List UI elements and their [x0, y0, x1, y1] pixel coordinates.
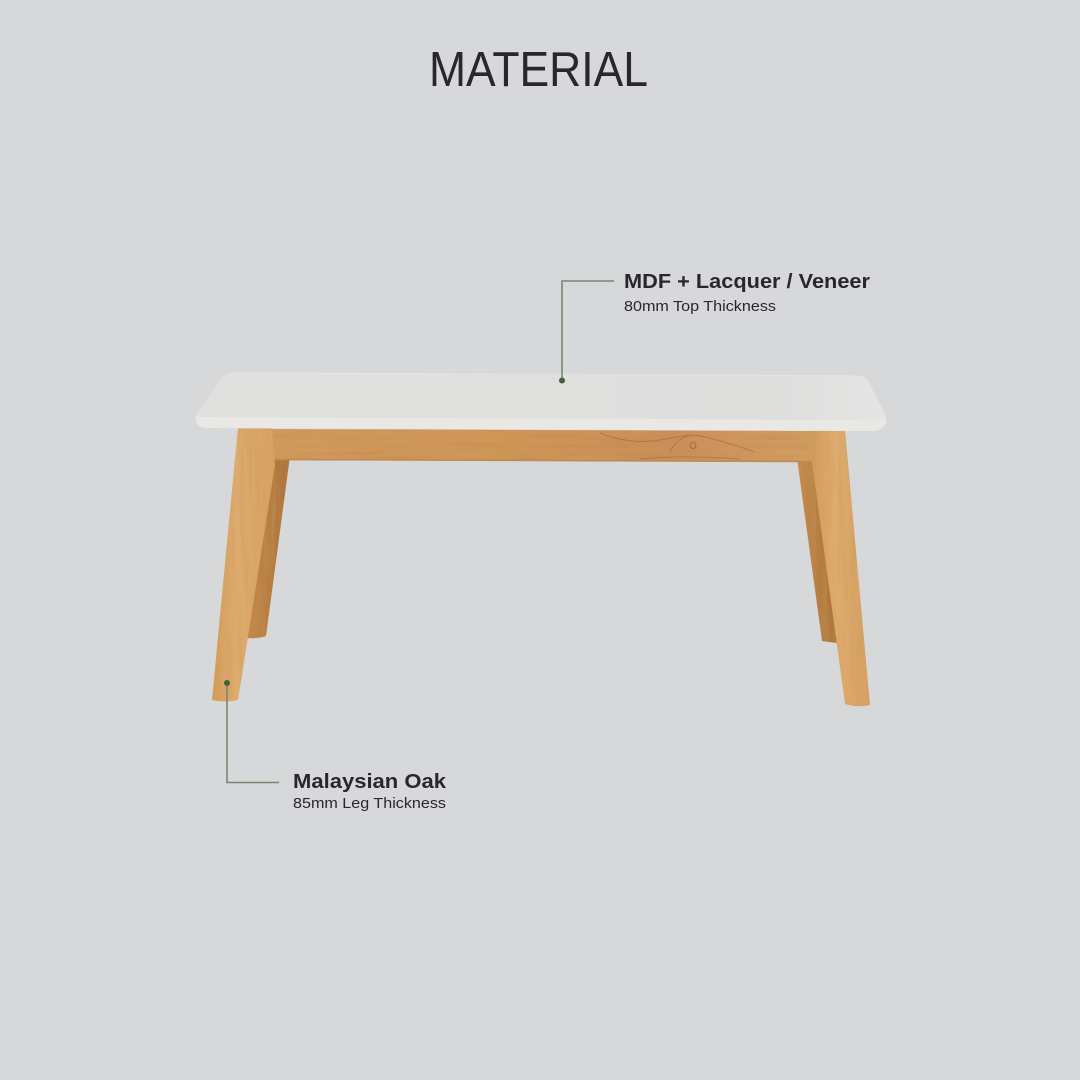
- front right leg: [812, 430, 870, 706]
- marker dot: leg: [224, 680, 230, 686]
- table top: [196, 373, 886, 431]
- apron rail: [270, 429, 813, 462]
- table illustration: [196, 373, 886, 706]
- heading: MDF: MDF + Lacquer / Veneer: [624, 271, 870, 293]
- leader line: leg: [227, 683, 279, 782]
- back right leg: [797, 458, 838, 643]
- leader line: top: [562, 281, 614, 380]
- title: MATERIAL: [429, 43, 648, 97]
- front left leg: [212, 427, 275, 702]
- subtext: top thickness: 80mm Top Thickness: [624, 298, 776, 315]
- heading: oak: Malaysian Oak: [293, 771, 447, 793]
- back left leg: [246, 456, 290, 638]
- callout: table top material: [559, 271, 870, 384]
- subtext: leg thickness: 85mm Leg Thickness: [293, 795, 446, 812]
- marker dot: top: [559, 378, 565, 384]
- callout: leg material: [224, 680, 447, 812]
